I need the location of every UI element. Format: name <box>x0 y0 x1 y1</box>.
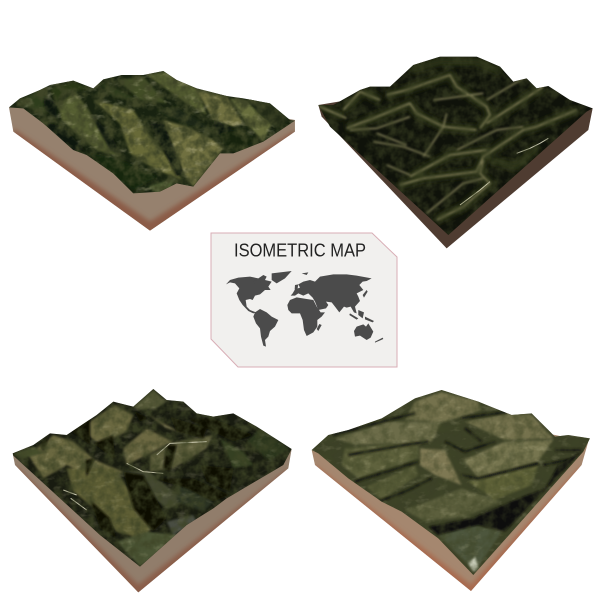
terrain block: top left <box>9 71 295 230</box>
world map <box>226 271 383 347</box>
trail <box>517 138 548 153</box>
soil base <box>312 434 588 591</box>
terrain block: top right <box>310 50 600 250</box>
card background <box>211 233 397 367</box>
soil base <box>12 448 292 592</box>
terrain block: bottom right <box>312 390 590 591</box>
mountain surface <box>9 71 295 194</box>
mountain surface <box>12 389 292 566</box>
mountain surface <box>312 390 590 575</box>
soil base <box>318 83 593 248</box>
terrain block: bottom left <box>12 389 292 592</box>
center card: isometric map <box>211 233 397 367</box>
mountain surface <box>318 56 592 235</box>
title: ISOMETRIC MAP <box>234 240 366 260</box>
soil base <box>9 107 295 230</box>
